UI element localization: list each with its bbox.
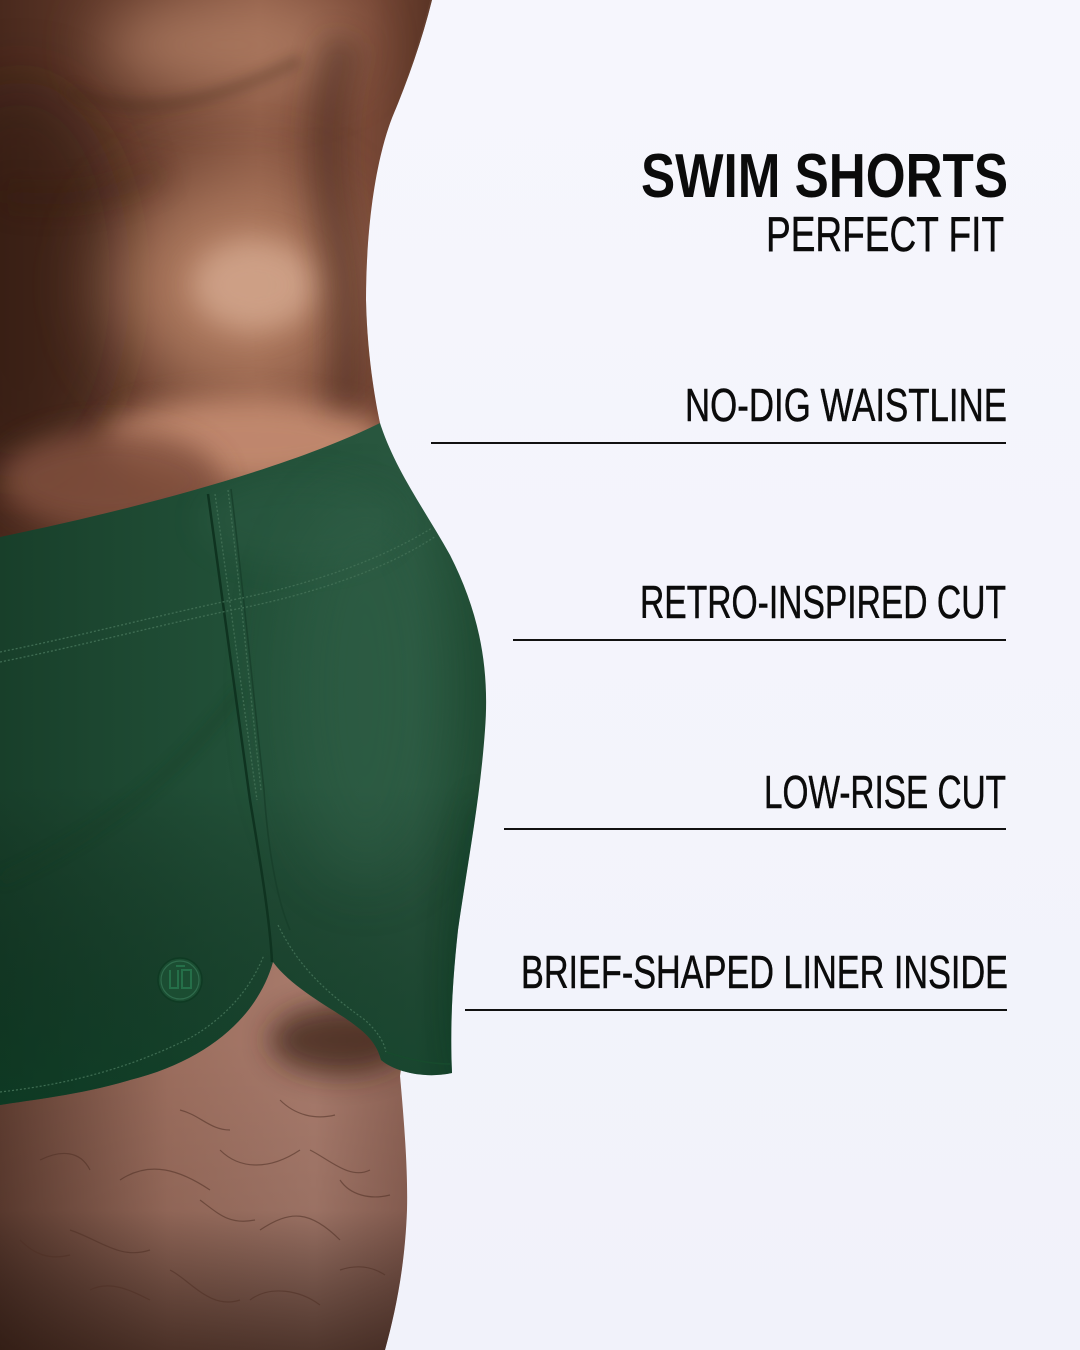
model leg [0,940,420,1350]
model torso [0,0,445,560]
waistband stitching [0,528,432,652]
side seam [208,494,272,962]
fabric fold [0,690,240,880]
title: SWIM SHORTS [641,142,1008,211]
hem stitching [0,955,264,1092]
logo badge [158,958,202,1002]
title [641,142,1008,262]
subtitle: PERFECT FIT [766,208,1004,262]
green swim shorts [0,423,486,1105]
